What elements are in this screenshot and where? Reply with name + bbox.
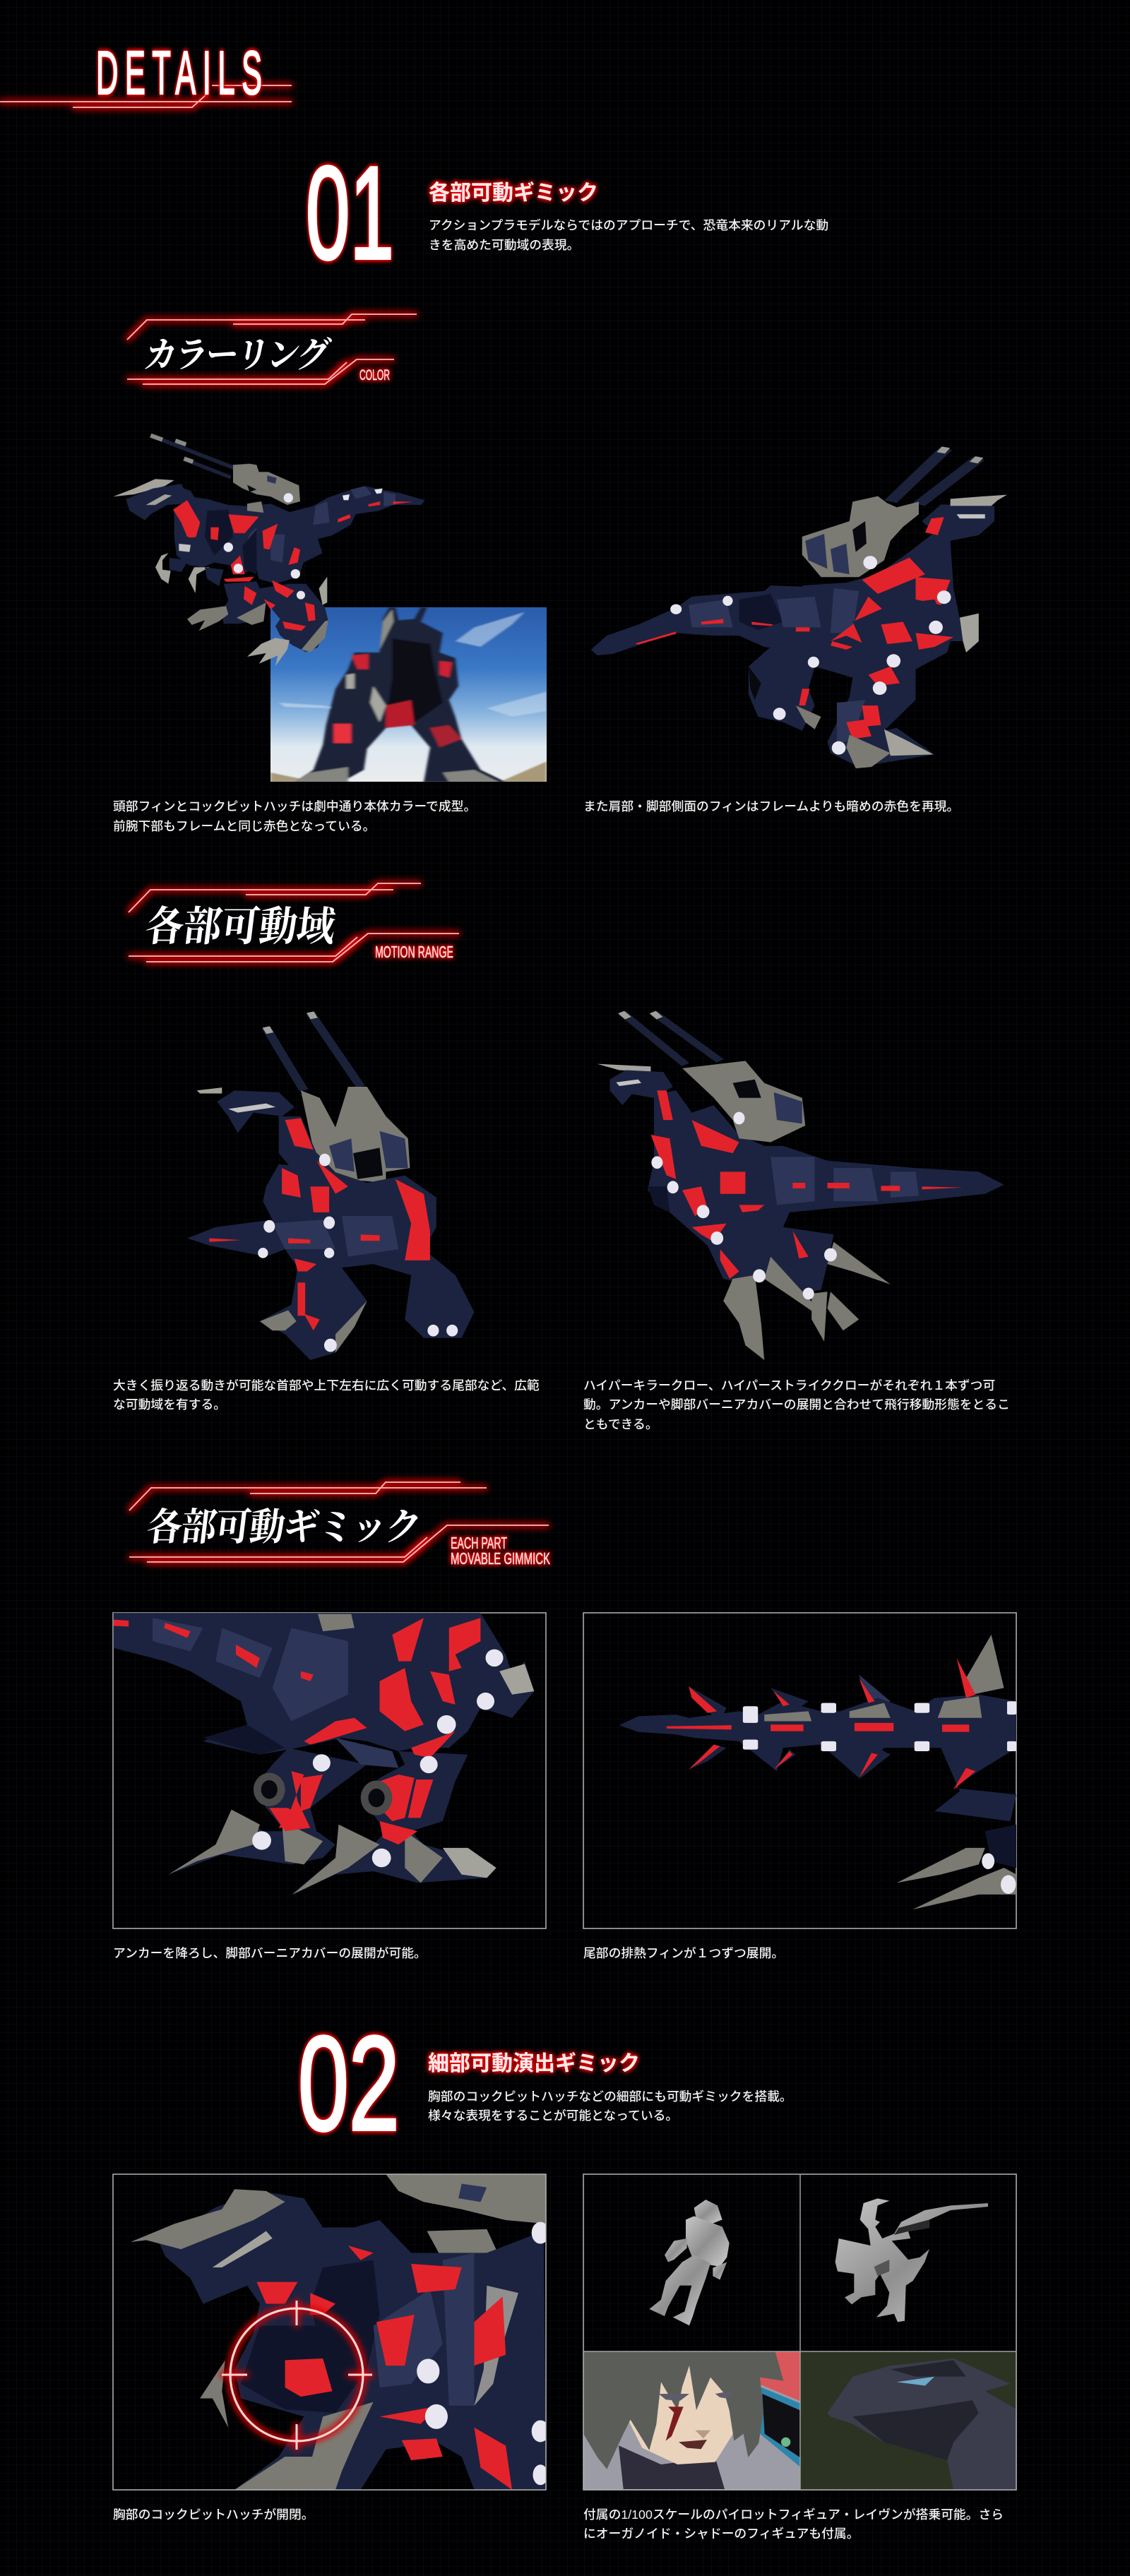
anime still: mech from below against sky [270,607,547,782]
sub heading: motion range [129,883,459,962]
caption: figures panel: にオーガノイド・シャドーのフィギュアも付属。 [583,2527,859,2541]
caption: motion range right: 動。アンカーや脚部バーニアカバーの展開と合わせて飛行移動形態をとるこ [583,1397,1010,1412]
anime still: organoid Shadow [800,2351,1016,2490]
number 01: 01 [306,138,394,287]
panel: leg anchor and burner covers [113,1613,546,1928]
heading text 各部可動域: 各部可動域 [143,904,338,950]
sub heading: color [127,314,417,384]
caption: figures panel: 付属の1/100スケールのパイロットフィギュア・レイヴンが搭乗可能。さら [583,2507,1004,2522]
section 01 description: アクションプラモデルならではのアプローチで、恐竜本来のリアルな動 [429,217,828,232]
caption: motion range left: な可動域を有する。 [113,1397,226,1412]
figure: organoid shadow [835,2198,988,2322]
reticle targeting cockpit [222,2301,372,2450]
mech image: front-left view [113,436,425,666]
section 01 heading: 各部可動ギミック [429,181,598,205]
sub heading: each part movable gimmick [129,1482,550,1568]
section 01 header [306,138,828,287]
section 02 header [298,2009,792,2159]
caption: motion range right: ともできる。 [583,1417,658,1431]
heading text 各部可動ギミック: 各部可動ギミック [144,1506,424,1549]
number 02: 02 [298,2009,400,2159]
section 01 description: きを高めた可動域の表現。 [429,238,579,252]
panel: cockpit hatch close-up [113,2174,549,2490]
label COLOR: COLOR [359,367,390,383]
page title: DETAILS: DETAILS [96,39,269,107]
caption: anchor panel: アンカーを降ろし、脚部バーニアカバーの展開が可能。 [113,1945,427,1960]
page title: DETAILS [0,39,292,107]
heading text カラーリング: カラーリング [141,335,333,375]
mech image: turned view with raised cannons [187,1012,474,1360]
panel: tail heat fins [583,1613,1016,1928]
caption: tail panel: 尾部の排熱フィンが１つずつ展開。 [583,1945,784,1960]
caption: left color: 頭部フィンとコックピットハッチは劇中通り本体カラーで成型。 [113,799,476,813]
mech image: flight pose with extended tail [597,1012,1004,1360]
panel: pilot and organoid figures with anime stills [583,2174,1016,2491]
section 02 heading: 細部可動演出ギミック [428,2052,640,2075]
caption: cockpit panel: 胸部のコックピットハッチが開閉。 [113,2507,314,2522]
section 02 description: 様々な表現をすることが可能となっている。 [428,2108,678,2123]
mech image: rear-right view [591,447,1007,768]
caption: left color: 前腕下部もフレームと同じ赤色となっている。 [113,819,375,833]
caption: motion range left: 大きく振り返る動きが可能な首部や上下左右に広く可動する尾部など、広範 [113,1378,540,1393]
label MOTION RANGE: MOTION RANGE [375,943,453,961]
caption: right color: また肩部・脚部側面のフィンはフレームよりも暗めの赤色を再現。 [583,799,959,813]
section 02 description: 胸部のコックピットハッチなどの細部にも可動ギミックを搭載。 [428,2089,792,2104]
label EACH PART MOVABLE GIMMICK: MOVABLE GIMMICK [451,1549,550,1568]
label EACH PART MOVABLE GIMMICK: EACH PART [451,1534,507,1552]
caption: motion range right: ハイパーキラークロー、ハイパーストライククローがそれぞれ１本ずつ可 [583,1378,995,1393]
figure: pilot [649,2200,730,2325]
anime still: pilot Raven [583,2351,801,2491]
